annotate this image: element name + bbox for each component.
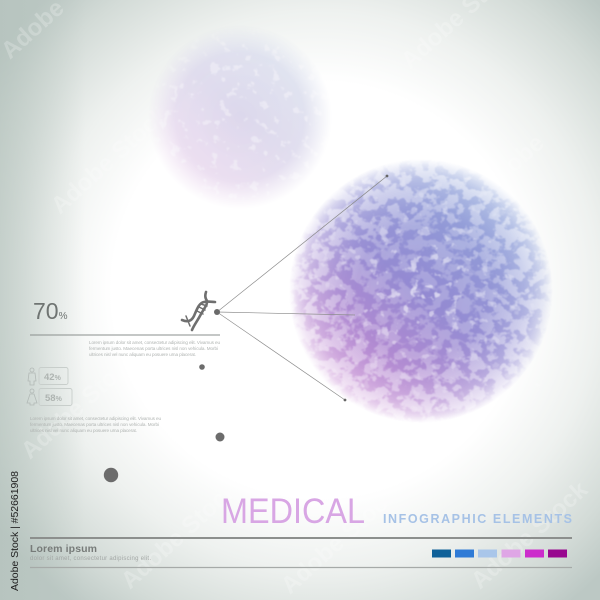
stat: female 58% <box>27 388 72 406</box>
subtitle: INFOGRAPHIC ELEMENTS <box>383 512 572 526</box>
bottom footer rule <box>30 566 572 568</box>
watermark: Adobe Stock <box>201 151 329 269</box>
colour swatches <box>432 550 567 558</box>
footer heading: Lorem ipsum <box>30 543 97 555</box>
text block: lower description: fermentum justo. Maecenas porta ultrices nisl non vehicula. Morbi <box>30 422 159 427</box>
text block: upper description <box>89 340 220 357</box>
stat: 70%: 70% <box>33 298 68 324</box>
text block: upper description: fermentum justo. Maecenas porta ultrices nisl non vehicula. Morbi <box>89 346 218 351</box>
watermark: Adobe Stock <box>251 306 379 424</box>
stat: male 42% <box>28 368 68 385</box>
watermark: Adobe Stock <box>276 481 404 599</box>
watermark: Adobe Stock <box>466 476 594 594</box>
stock id label: Adobe Stock | #52661908 <box>9 471 21 591</box>
text block: upper description: Lorem ipsum dolor sit amet, consectetur adipiscing elit. Vivamus eu <box>89 340 220 345</box>
top footer rule <box>30 537 572 539</box>
large cell sphere <box>285 155 557 427</box>
stat: male 42%: 42% <box>44 372 62 383</box>
connector node dot <box>214 309 220 315</box>
icon: DNA helix <box>182 292 215 330</box>
footer subtext: dolor sit amet, consectetur adipiscing elit. <box>30 556 151 562</box>
text block: lower description <box>30 416 161 433</box>
divider under stat <box>30 334 220 336</box>
title: MEDICAL <box>221 492 365 531</box>
text block: upper description: ultrices nisl vel nunc aliquam eu posuere urna placerat. <box>89 352 196 357</box>
text block: lower description: ultrices nisl vel nunc aliquam eu posuere urna placerat. <box>30 428 137 433</box>
connector lines <box>217 175 388 401</box>
watermark: Adobe Stock <box>16 346 144 464</box>
watermark: Adobe <box>476 129 550 199</box>
watermark: Adobe Stock <box>46 101 174 219</box>
watermark: Adobe Stock <box>116 476 244 594</box>
text block: lower description: Lorem ipsum dolor sit amet, consectetur adipiscing elit. Vivamus eu <box>30 416 161 421</box>
small cell sphere <box>156 36 324 202</box>
stat: female 58%: 58% <box>45 393 63 404</box>
decorative dots <box>104 364 224 482</box>
watermark: Adobe Stock <box>406 356 534 474</box>
